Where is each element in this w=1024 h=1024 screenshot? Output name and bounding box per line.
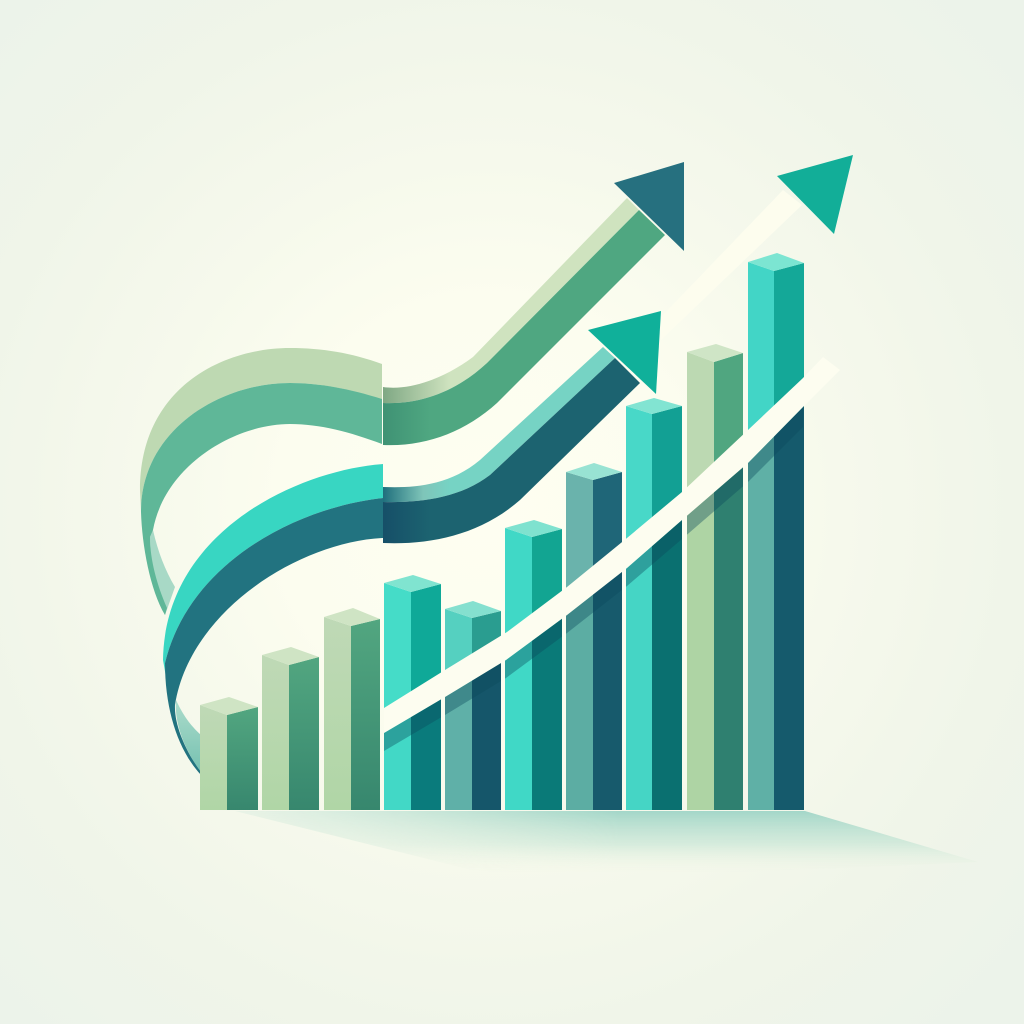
teal ribbon bright band (163, 464, 383, 677)
bar 10 (748, 253, 804, 810)
green ribbon (140, 162, 684, 615)
teal ribbon dark band (165, 498, 383, 775)
cream trend line (384, 357, 840, 733)
teal ribbon pale tail (176, 700, 201, 772)
teal arrow head (588, 311, 661, 394)
trend line shadow (384, 407, 803, 751)
bar 6 (505, 520, 562, 810)
bar 9 (687, 344, 743, 810)
cream arrow shaft (661, 190, 802, 340)
bar 1 (200, 697, 258, 810)
green ribbon mid band (141, 383, 382, 615)
green ribbon light band (140, 348, 382, 512)
teal arrow shaft (383, 358, 640, 543)
bar 7 (566, 463, 622, 810)
bar 4 (384, 575, 441, 810)
bar chart (200, 253, 804, 810)
green arrow dark head (614, 162, 684, 251)
floor shadow (236, 811, 958, 860)
green ribbon pale underside (150, 530, 175, 615)
cream arrow (661, 155, 853, 340)
green arrow shaft light edge (383, 198, 639, 403)
bar 2 (262, 647, 319, 810)
teal arrow shaft light edge (383, 347, 615, 502)
cream arrow teal head (777, 155, 853, 234)
teal ribbon (163, 311, 661, 775)
bar lower sections below trend line (411, 406, 804, 810)
bar 8 (626, 398, 682, 810)
green arrow shaft (383, 210, 665, 445)
bar 3 (324, 608, 380, 810)
bar 5 (445, 601, 501, 810)
growth chart illustration (140, 155, 976, 864)
